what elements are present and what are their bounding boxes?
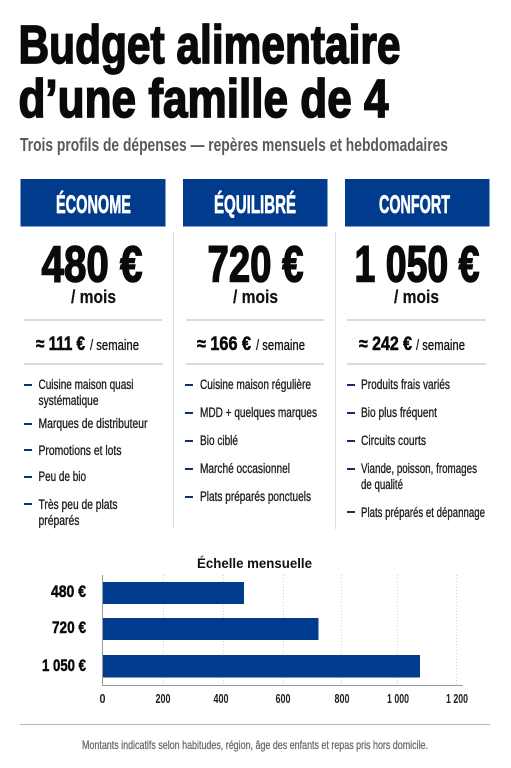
list: économe: Marques de distributeur [38,416,148,431]
panel: confort [345,179,490,520]
bar: 720 € [102,618,318,640]
list: économe: Très peu de plats [38,497,118,512]
header: économe: ÉCONOME [56,190,131,219]
title: d’une famille de 4 [18,69,388,129]
weekly amount: équilibré: ≈ 166 € [197,334,251,355]
axis tick labels: 1 200 [446,692,468,706]
bar: 1 050 € [102,655,420,678]
weekly amount: équilibré [197,334,305,355]
list: confort: de qualité [361,477,403,492]
header: équilibré [183,179,328,226]
chart axes [102,575,463,686]
monthly amount: équilibré [208,236,304,307]
bar labels: 720 € [52,618,86,637]
list: économe: préparés [38,513,80,528]
header: économe [20,179,166,226]
monthly amount: économe: 480 € [42,236,142,292]
weekly amount: économe: ≈ 111 € [36,334,85,355]
axis tick labels [100,692,468,706]
list: économe [24,377,148,528]
list: équilibré: MDD + quelques marques [200,405,317,420]
weekly amount: équilibré: / semaine [256,337,305,354]
list: équilibré: Bio ciblé [200,433,238,448]
panel: équilibré [183,179,328,504]
axis tick labels: 0 [100,692,106,706]
bar labels: 480 € [51,582,86,601]
chart: échelle mensuelle [42,555,468,706]
list: économe: Peu de bio [38,469,86,484]
chart title: Échelle mensuelle [197,555,312,571]
weekly amount: économe: / semaine [90,337,139,354]
monthly amount: économe [42,236,142,307]
monthly amount: économe: / mois [71,287,116,307]
weekly amount: confort: / semaine [416,337,465,354]
header: confort [345,179,490,226]
monthly amount: équilibré: / mois [233,287,278,307]
monthly amount: confort [354,236,480,307]
header: confort: CONFORT [379,191,450,219]
title: Budget alimentaire [18,15,400,75]
list: économe: systématique [38,393,98,408]
title [18,15,400,129]
weekly amount: confort [359,334,465,355]
bar labels: 1 050 € [42,656,86,675]
weekly amount: économe [36,334,139,355]
list: équilibré: Cuisine maison régulière [200,377,311,392]
list: confort: Circuits courts [361,433,426,448]
list: confort [347,377,485,520]
axis tick labels: 400 [214,692,229,706]
list: confort: Produits frais variés [361,377,450,392]
header: équilibré: ÉQUILIBRÉ [214,190,296,219]
axis tick labels: 1 000 [387,692,409,706]
monthly amount: équilibré: 720 € [208,236,304,292]
bar: 480 € [102,582,244,604]
axis tick labels: 600 [276,692,291,706]
list: économe: Cuisine maison quasi [38,377,134,392]
weekly amount: confort: ≈ 242 € [359,334,412,355]
list: équilibré: Plats préparés ponctuels [200,489,311,504]
list: équilibré [185,377,317,504]
bar labels [42,582,86,675]
monthly amount: confort: / mois [394,287,439,307]
list: équilibré: Marché occasionnel [200,461,290,476]
panel: économe [20,179,166,528]
list: confort: Bio plus fréquent [361,405,437,420]
axis tick labels: 800 [334,692,350,706]
list: économe: Promotions et lots [38,443,122,458]
axis tick labels: 200 [156,692,171,706]
